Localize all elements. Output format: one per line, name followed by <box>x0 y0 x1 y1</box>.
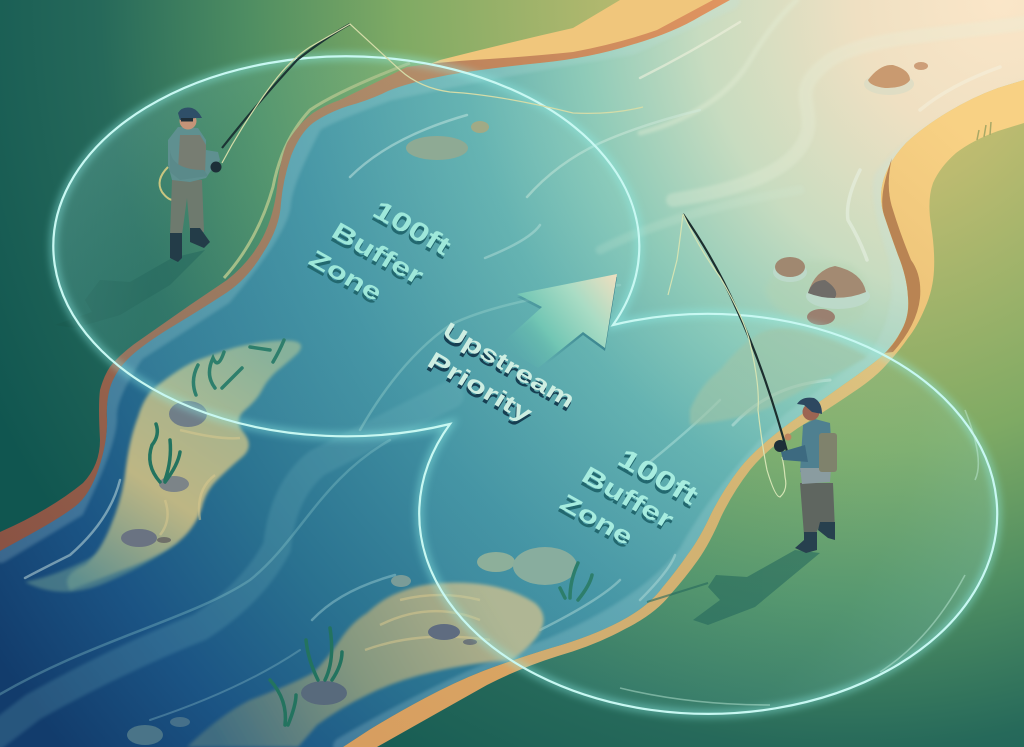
label: left buffer zone: 100ft <box>367 198 456 265</box>
label: right buffer zone: 100ft <box>612 446 703 514</box>
rock shallows <box>765 261 868 328</box>
fly rod left <box>222 24 350 148</box>
label: left buffer zone: 100ft <box>368 195 457 261</box>
label: upstream priority: Priority <box>423 347 537 428</box>
label: right buffer zone: Buffer <box>577 461 679 534</box>
rocks <box>121 62 928 745</box>
left bank thin sand edge <box>224 63 410 278</box>
bank mud right <box>882 158 920 353</box>
sand texture <box>160 430 490 650</box>
label: upstream priority: Upstream <box>437 321 579 416</box>
fly line left <box>222 24 643 163</box>
right shallows <box>690 328 867 425</box>
angler right <box>668 214 837 553</box>
left bank sand <box>340 0 730 105</box>
label: right buffer zone: Zone <box>555 489 638 551</box>
label: upstream priority: Priority <box>422 351 536 431</box>
label: left buffer zone <box>303 195 457 310</box>
label: left buffer zone: Buffer <box>327 217 429 290</box>
label: left buffer zone: Zone <box>303 249 386 310</box>
grass tuft <box>977 122 991 140</box>
label: left buffer zone: Zone <box>304 245 387 307</box>
label: right buffer zone: 100ft <box>613 443 704 511</box>
faint sandbar tail <box>25 540 180 592</box>
upstream arrow <box>500 274 617 371</box>
bank sand right <box>343 80 1024 747</box>
left bank mud <box>0 0 735 553</box>
label: right buffer zone <box>554 443 704 554</box>
angler left <box>160 24 643 262</box>
label: right buffer zone: Zone <box>554 493 637 554</box>
label: right buffer zone: Buffer <box>576 465 678 538</box>
fly line right <box>668 214 786 497</box>
water plants <box>150 340 592 725</box>
lower sandbar <box>187 583 544 747</box>
central sandbar <box>67 340 301 590</box>
label: upstream priority: Upstream <box>438 317 580 413</box>
label: left buffer zone: Buffer <box>326 221 428 294</box>
angler shadows <box>55 250 820 625</box>
fly rod right <box>683 214 788 455</box>
